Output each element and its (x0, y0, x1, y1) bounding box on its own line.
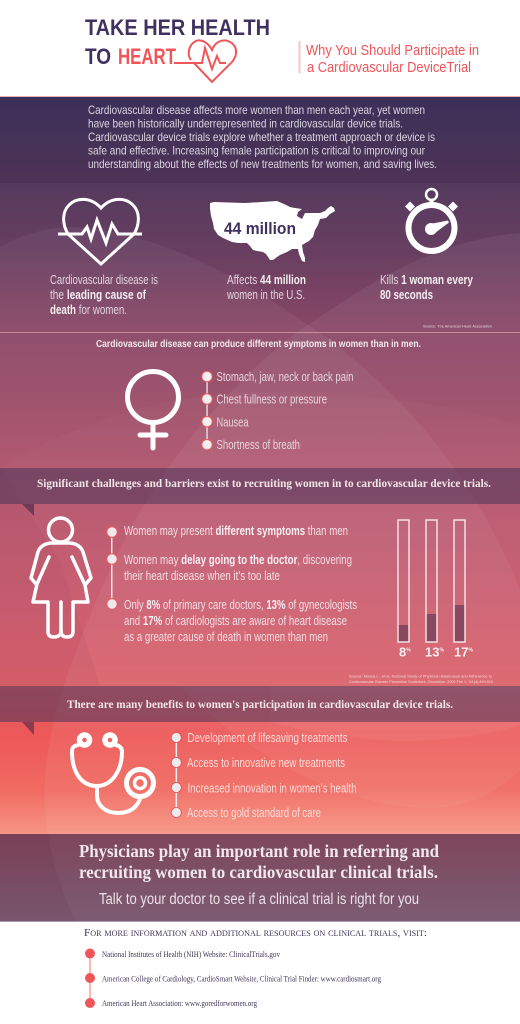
panel: introduction: Cardiovascular device trials explore whether a treatment approach or device is (88, 130, 435, 144)
stat text: affects 44 million: Affects 44 million (227, 272, 306, 287)
resources list: American College of Cardiology, CardioSmart Website, Clinical Trial Finder: www.cardiosmart.org (102, 974, 382, 984)
bar chart: physician awareness: % (468, 648, 473, 654)
barriers list: and 17% of cardiologists are aware of heart disease (124, 613, 347, 628)
panel: statistics (50, 189, 492, 328)
panel: introduction: Cardiovascular disease affects more women than men each year, yet women (88, 103, 425, 117)
icon: heart with pulse line (58, 199, 142, 264)
panel: call to action (0, 834, 520, 922)
header: subtitle (298, 41, 479, 76)
title line 1: TAKE HER HEALTH (85, 15, 270, 40)
barriers list: Women may delay going to the doctor, discovering (124, 552, 352, 567)
symptoms heading: Cardiovascular disease can produce different symptoms in women than in men. (96, 338, 421, 350)
header: subtitle: a Cardiovascular DeviceTrial (307, 59, 471, 76)
benefits list: Increased innovation in women's health (188, 782, 357, 796)
bar chart: physician awareness: 13 (425, 644, 439, 660)
stat text: affects 44 million: women in the U.S. (226, 287, 305, 302)
stat text: leading cause: Cardiovascular disease is (50, 272, 158, 287)
source note: Source: The American Heart Association (423, 324, 492, 328)
icon: woman figure (31, 518, 91, 637)
stat text: kills 1 woman: Kills 1 woman every (380, 272, 474, 287)
panel: introduction: have been historically underrepresented in cardiovascular device trials. (88, 116, 403, 130)
title line 2: TO (85, 44, 111, 69)
panel: barriers (31, 518, 494, 684)
barriers list: Only 8% of primary care doctors, 13% of gynecologists (124, 597, 357, 612)
panel: benefits (72, 731, 357, 820)
panel: introduction: safe and effective. Increasing female participation is critical to improving our (88, 144, 425, 158)
banner: barriers (0, 468, 520, 516)
stat text: kills 1 woman: 80 seconds (380, 287, 433, 302)
benefits list (171, 731, 357, 820)
panel: call to action: Physicians play an important role in referring and (79, 841, 439, 861)
barriers list: Women may present different symptoms than men (124, 523, 348, 538)
barriers list: as a greater cause of death in women than men (124, 629, 328, 644)
benefits list: Access to innovative new treatments (187, 756, 345, 770)
bar chart: physician awareness: 8 (399, 644, 406, 660)
benefits list: Access to gold standard of care (187, 806, 321, 820)
stat text: leading cause: the leading cause of (50, 287, 147, 302)
bar chart: physician awareness: % (406, 648, 411, 654)
icon: US map with 44 million: 44 million (224, 219, 296, 238)
panel: resources (84, 927, 427, 1008)
stat text: affects 44 million (226, 272, 306, 302)
bar chart: physician awareness: 17 (454, 644, 468, 660)
panel: call to action: Talk to your doctor to see if a clinical trial is right for you (99, 891, 419, 908)
header: title (85, 15, 270, 82)
panel: call to action: recruiting women to cardiovascular clinical trials. (79, 862, 438, 882)
panel: symptoms (96, 338, 421, 452)
barriers list (107, 523, 357, 644)
icon: US map with 44 million (210, 201, 335, 262)
source note (349, 674, 494, 684)
icon: stopwatch (405, 189, 458, 251)
header: subtitle: Why You Should Participate in (306, 42, 479, 59)
source note: Source: Mosca L., et al. National Study of Physician Awareness and Adherence to (349, 674, 492, 678)
banner: benefits: There are many benefits to women's participation in cardiovascular device trials. (67, 699, 453, 711)
icon: female symbol (128, 372, 178, 448)
resources list: American Heart Association: www.goredforwomen.org (102, 998, 258, 1008)
symptoms list: Nausea (216, 416, 249, 430)
symptoms list: Chest fullness or pressure (216, 392, 327, 406)
panel: introduction: understanding about the effects of new treatments for women, and saving lives. (88, 157, 437, 171)
resources list (85, 948, 382, 1008)
bar chart: physician awareness: % (439, 648, 444, 654)
title word heart: HEART (118, 44, 176, 69)
source note: Cardiovascular Disease Prevention Guidelines. Circulation. 2005 Feb 1; 111(4):499-510 (349, 679, 494, 684)
stat text: leading cause (50, 272, 158, 317)
panel: introduction (0, 96, 520, 183)
banner: benefits (0, 686, 520, 735)
stat text: kills 1 woman (380, 272, 474, 302)
barriers list: their heart disease when it's too late (124, 568, 280, 583)
symptoms list: Stomach, jaw, neck or back pain (216, 370, 354, 384)
symptoms list (202, 370, 354, 452)
symptoms list: Shortness of breath (216, 438, 300, 452)
stat text: leading cause: death for women. (50, 302, 127, 317)
icon: stethoscope (72, 735, 154, 813)
icon: heart with pulse (174, 40, 236, 82)
banner: barriers: Significant challenges and barriers exist to recruiting women in to cardiovascular device trials. (37, 478, 491, 490)
resources heading: For more information and additional resources on clinical trials, visit: (84, 927, 427, 939)
benefits list: Development of lifesaving treatments (188, 731, 348, 745)
bar chart: physician awareness (398, 520, 473, 660)
resources list: National Institutes of Health (NIH) Website: ClinicalTrials.gov (102, 949, 281, 959)
